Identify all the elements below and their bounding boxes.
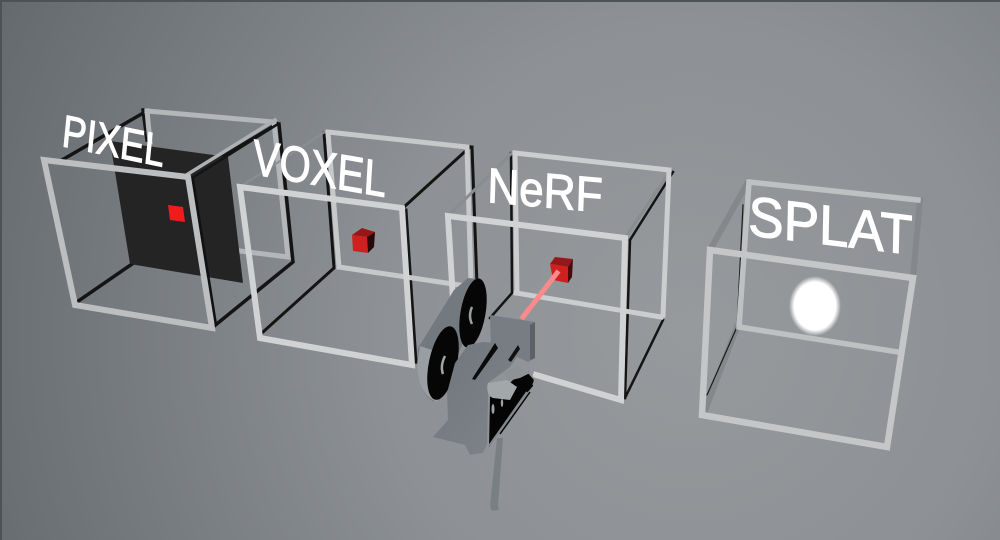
cube: voxel xyxy=(240,132,477,365)
back frame xyxy=(147,111,288,257)
reel belt lower side xyxy=(417,346,438,402)
front frame xyxy=(240,187,412,365)
body slots xyxy=(472,343,498,380)
label: PIXEL: PIXEL xyxy=(60,105,167,177)
roller xyxy=(487,380,517,400)
front frame xyxy=(702,250,913,447)
back frame xyxy=(328,132,473,287)
red cube xyxy=(550,257,573,283)
top right edge xyxy=(188,120,275,174)
icon: movie camera xyxy=(417,276,535,511)
panel: dark pixel plane xyxy=(110,141,243,283)
red voxel xyxy=(352,228,375,253)
red pixel xyxy=(168,205,185,222)
strut xyxy=(489,392,527,446)
cube: nerf xyxy=(448,153,673,400)
label: NeRF: NeRF xyxy=(487,159,603,223)
back frame xyxy=(739,182,918,352)
cube: pixel xyxy=(44,110,293,328)
reel belt xyxy=(417,278,478,401)
laser ray xyxy=(523,273,557,317)
rear reel xyxy=(455,276,491,350)
label: VOXEL: VOXEL xyxy=(251,129,388,208)
back frame xyxy=(515,153,669,317)
glowing splat xyxy=(789,276,841,336)
cube: splat xyxy=(702,182,920,447)
front frame xyxy=(44,160,212,328)
black edges xyxy=(263,133,477,362)
black edges xyxy=(450,153,673,398)
dark top and right edges xyxy=(704,182,920,413)
mechanism xyxy=(489,371,534,447)
front frame xyxy=(448,216,625,400)
front plate xyxy=(490,315,535,362)
handle xyxy=(490,438,503,511)
drive rings xyxy=(527,371,535,385)
label: SPLAT: SPLAT xyxy=(748,184,913,267)
body xyxy=(433,342,517,455)
black edges xyxy=(62,110,293,327)
bracket xyxy=(505,366,530,381)
front reel xyxy=(422,323,464,403)
